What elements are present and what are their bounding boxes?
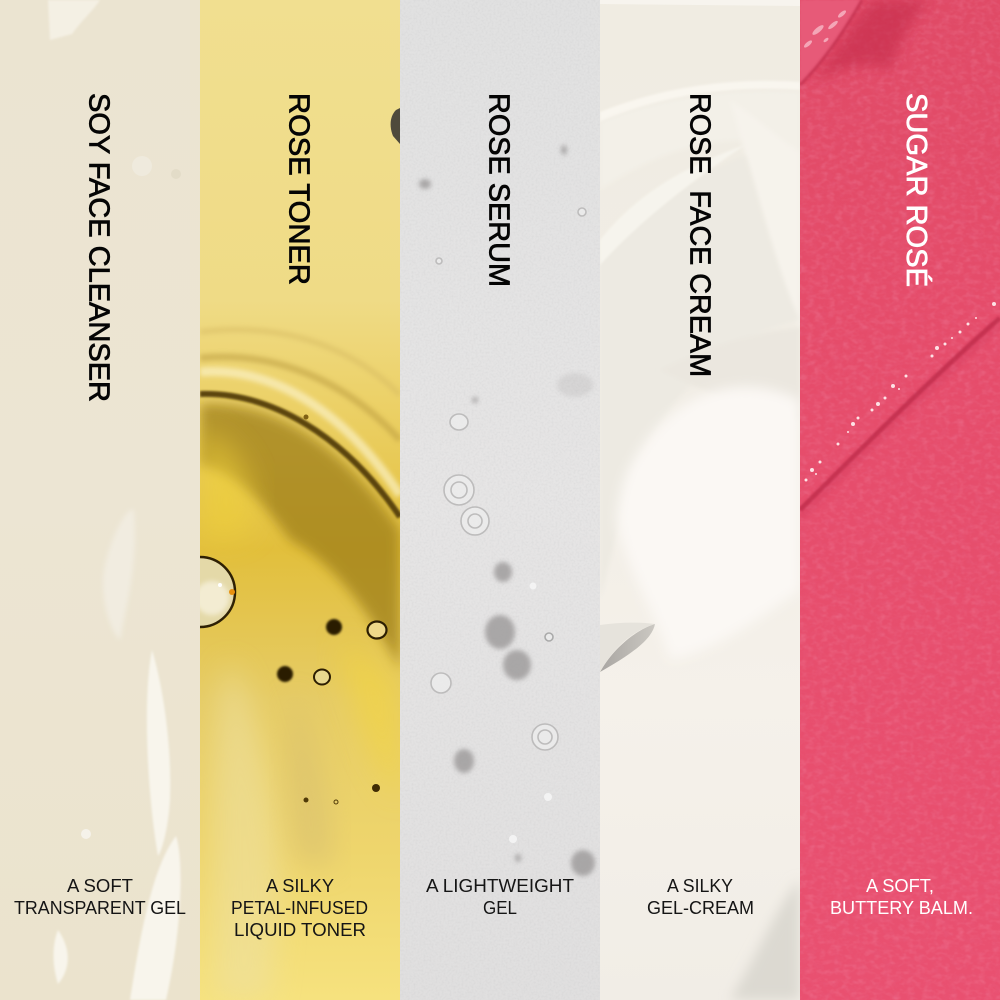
heading: rose toner: ROSE TONER [282, 93, 314, 285]
description: rose face cream [647, 875, 754, 918]
description: rose toner: A SILKY [266, 875, 334, 896]
heading: rose serum: ROSE SERUM [482, 93, 514, 287]
panel: rose serum [400, 0, 600, 1000]
description: rose serum: GEL [483, 897, 517, 918]
description: sugar rose: BUTTERY BALM. [830, 897, 973, 918]
description: soy face cleanser [14, 875, 186, 918]
icon: bubbles [431, 208, 586, 843]
description: soy face cleanser: TRANSPARENT GEL [14, 897, 186, 918]
icon: large bubble [200, 556, 236, 628]
top highlights [803, 9, 847, 49]
heading: sugar rose: SUGAR ROSÉ [900, 93, 933, 287]
description: rose face cream: A SILKY [667, 875, 733, 896]
grey blobs [419, 145, 595, 876]
heading: rose face cream: ROSE FACE CREAM [684, 93, 716, 377]
panel: sugar rose [800, 0, 1000, 1000]
panel: rose face cream [600, 0, 800, 1000]
panel: rose toner [200, 0, 400, 1000]
description: rose toner: PETAL-INFUSED [231, 897, 368, 918]
description: rose toner [231, 875, 368, 940]
description: sugar rose [830, 875, 973, 918]
description: sugar rose: A SOFT, [866, 875, 934, 896]
description: rose serum: A LIGHTWEIGHT [426, 875, 574, 896]
sparkle highlights [804, 302, 996, 482]
description: rose face cream: GEL-CREAM [647, 897, 754, 918]
description: soy face cleanser: A SOFT [67, 875, 133, 896]
description: rose serum [426, 875, 574, 918]
panel: soy face cleanser [0, 0, 200, 1000]
icon: oil droplets [277, 414, 386, 804]
description: rose toner: LIQUID TONER [234, 919, 366, 940]
heading: soy face cleanser: SOY FACE CLEANSER [82, 93, 114, 402]
